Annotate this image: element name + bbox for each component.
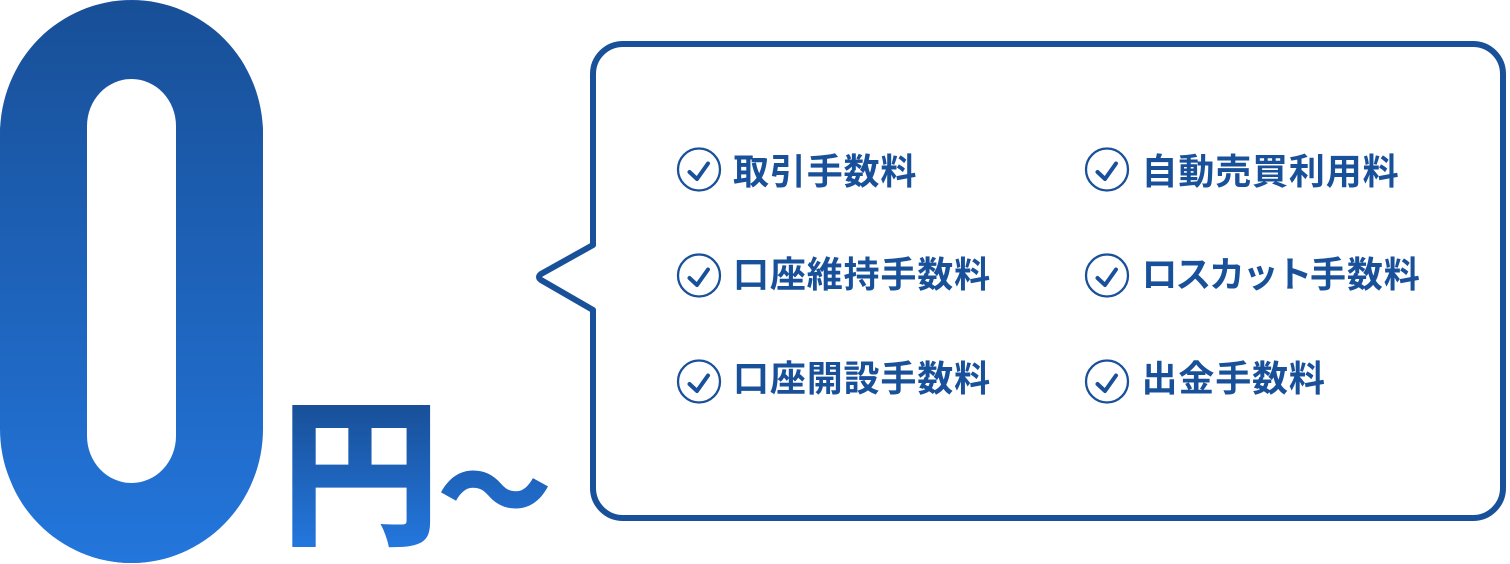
item: 自動売買利用料 xyxy=(1086,148,1399,192)
icon: check circle xyxy=(1086,148,1128,190)
icon: check circle xyxy=(678,254,720,296)
item: 口座維持手数料 xyxy=(678,254,991,296)
item: 出金手数料 xyxy=(1086,358,1326,402)
label: 取引手数料 xyxy=(733,151,917,192)
icon: check circle xyxy=(678,360,720,402)
label: 口座開設手数料 xyxy=(733,358,991,399)
label: 出金手数料 xyxy=(1142,358,1326,399)
icon: check circle xyxy=(678,148,720,190)
icon: check circle xyxy=(1086,254,1128,296)
item: 取引手数料 xyxy=(678,148,917,192)
label: 自動売買利用料 xyxy=(1142,151,1399,192)
speech bubble panel xyxy=(539,44,1503,518)
icon: check circle xyxy=(1086,360,1128,402)
item: 口座開設手数料 xyxy=(678,358,991,402)
tilde: 〜 xyxy=(437,401,552,564)
item: ロスカット手数料 xyxy=(1086,254,1421,296)
label: 口座維持手数料 xyxy=(733,254,991,295)
label: ロスカット手数料 xyxy=(1142,254,1421,295)
